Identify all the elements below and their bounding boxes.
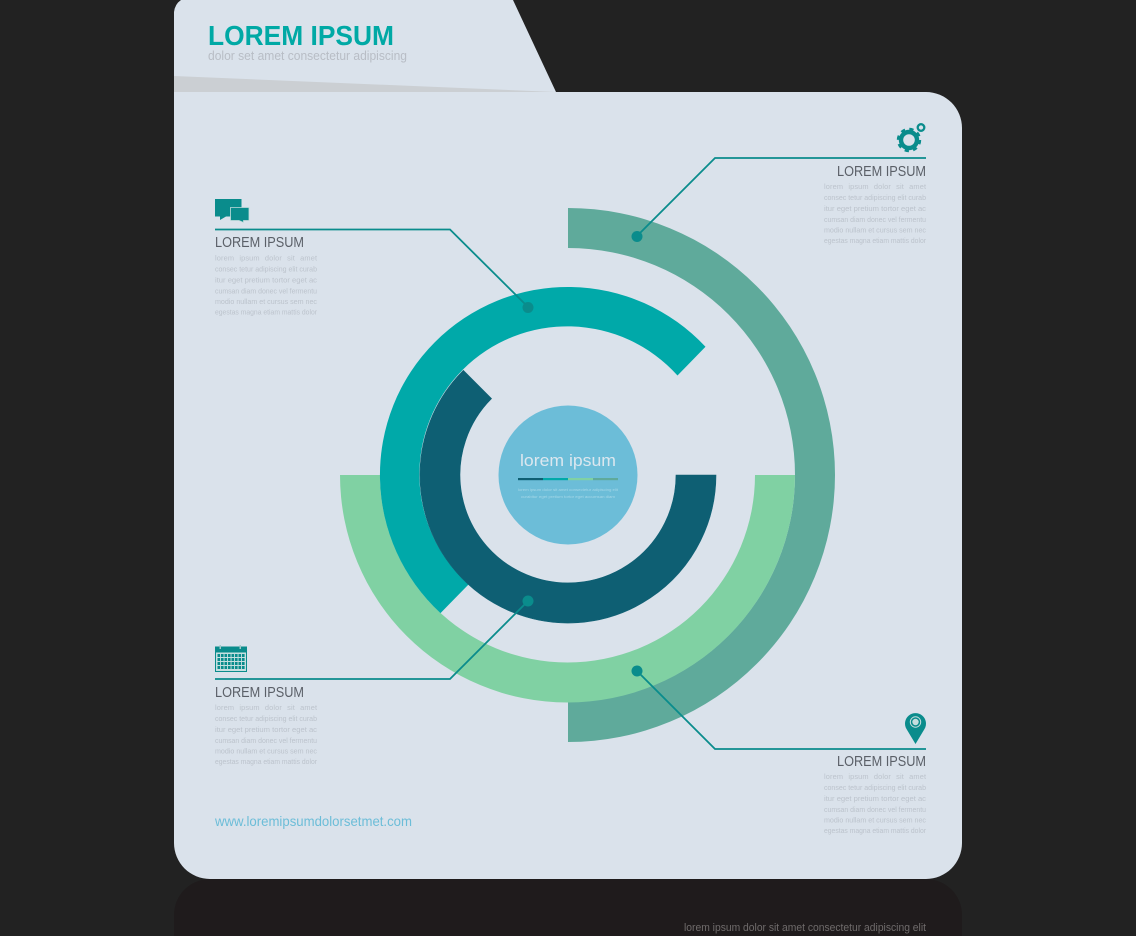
body text: modio nullam et cursus sem nec (824, 226, 926, 234)
icon: chat bubbles (215, 199, 249, 222)
icon: calendar (215, 645, 247, 672)
callout: top right (632, 124, 926, 245)
body text: consec tetur adipiscing elit curab (824, 193, 926, 202)
body text: cumsan diam donec vel fermentu (824, 215, 926, 224)
body text: lorem ipsum dolor sit amet (215, 254, 317, 262)
heading: LOREM IPSUM (837, 754, 926, 770)
folder panel (174, 0, 962, 879)
callout: bottom right (632, 666, 926, 835)
leader dot (522, 302, 534, 313)
center heading: lorem ipsum (520, 451, 616, 470)
body text: itur eget pretium tortor eget ac (824, 794, 926, 803)
body text: modio nullam et cursus sem nec (824, 816, 926, 824)
reflection panel (174, 879, 962, 936)
heading: LOREM IPSUM (215, 685, 304, 701)
title: LOREM IPSUM (208, 20, 394, 51)
ring: teal (380, 287, 706, 613)
body text: egestas magna etiam mattis dolor (215, 757, 317, 766)
icon: map pin (905, 713, 926, 744)
body text: consec tetur adipiscing elit curab (215, 714, 317, 723)
leader line (637, 158, 926, 236)
leader dot (632, 231, 642, 242)
concentric ring chart (340, 208, 835, 742)
body text (215, 703, 317, 766)
body text (824, 772, 926, 835)
title block (208, 20, 407, 63)
body text: cumsan diam donec vel fermentu (824, 805, 926, 814)
body text: modio nullam et cursus sem nec (215, 297, 317, 306)
body text: cumsan diam donec vel fermentu (215, 286, 317, 296)
body text: egestas magna etiam mattis dolor (824, 236, 926, 245)
body text: lorem ipsum dolor sit amet (215, 703, 317, 712)
ring: dark blue (420, 370, 716, 623)
callout: bottom left (215, 596, 534, 766)
center four-colour bar (518, 478, 618, 480)
folder tab shadow (174, 76, 556, 92)
website url: www.loremipsumdolorsetmet.com (214, 813, 412, 829)
body text: modio nullam et cursus sem nec (215, 746, 317, 756)
leader dot (522, 596, 534, 606)
body text: egestas magna etiam mattis dolor (824, 826, 926, 835)
center small text: lorem ipsum dolor sit amet consectetur adipiscing elit (518, 487, 619, 492)
body text: consec tetur adipiscing elit curab (215, 264, 317, 274)
ring: outer sea green (568, 208, 835, 742)
center small text (518, 487, 619, 499)
body text: lorem ipsum dolor sit amet (824, 772, 926, 781)
leader line (215, 601, 528, 679)
leader dot (632, 666, 642, 676)
body text: itur eget pretium tortor eget ac (824, 204, 926, 213)
leader line (215, 230, 528, 307)
icon: gears (898, 124, 924, 151)
heading: LOREM IPSUM (215, 235, 304, 251)
reflection caption: lorem ipsum dolor sit amet consectetur adipiscing elit (684, 922, 926, 934)
leader line (637, 671, 926, 749)
heading: LOREM IPSUM (837, 164, 926, 180)
center small text: curabitur eget pretium tortor eget accumsan diam (521, 494, 616, 499)
center circle (498, 406, 638, 544)
ring: light green (340, 475, 795, 702)
body text (824, 182, 926, 245)
subtitle: dolor set amet consectetur adipiscing (208, 48, 407, 63)
body text: egestas magna etiam mattis dolor (215, 308, 317, 316)
body text: itur eget pretium tortor eget ac (215, 725, 317, 734)
body text: consec tetur adipiscing elit curab (824, 783, 926, 792)
body text: itur eget pretium tortor eget ac (215, 276, 317, 284)
body text: lorem ipsum dolor sit amet (824, 182, 926, 191)
body text (215, 254, 317, 316)
callout: top left (215, 199, 534, 316)
body text: cumsan diam donec vel fermentu (215, 736, 317, 745)
